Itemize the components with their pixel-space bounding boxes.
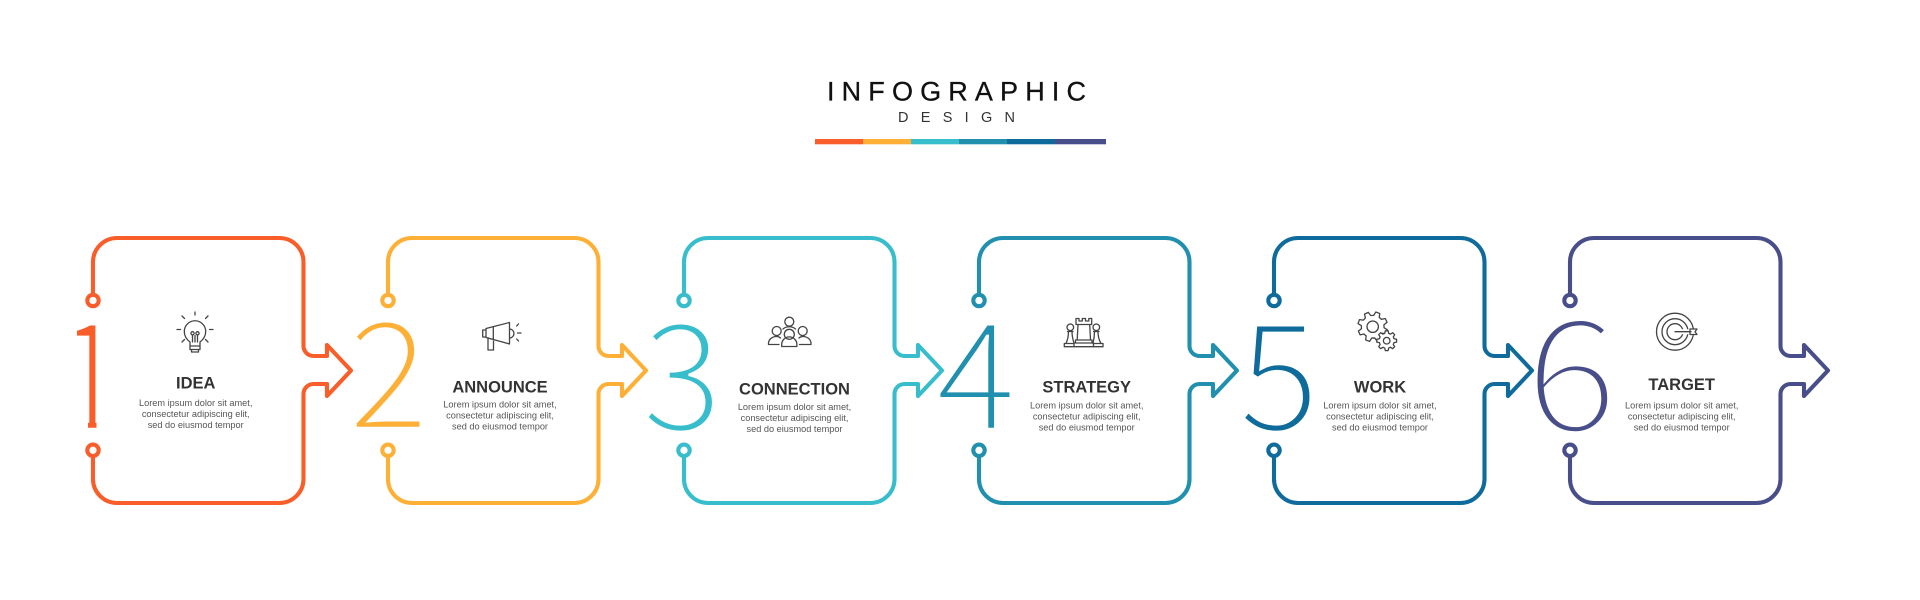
text: work body [1323, 401, 1437, 433]
heading: target: TARGET [1648, 376, 1715, 394]
frame and arrow 6 [1564, 238, 1828, 503]
text: target body: consectetur adipiscing elit, [1628, 412, 1736, 422]
text: target body: sed do eiusmod tempor [1634, 423, 1730, 433]
text: idea body: Lorem ipsum dolor sit amet, [139, 398, 252, 408]
text: announce body [443, 400, 557, 432]
text: strategy body [1030, 401, 1143, 433]
text: connection body [738, 402, 851, 434]
text: idea body [139, 398, 252, 430]
text: target body [1625, 401, 1738, 433]
panel: step 3 connection [642, 238, 942, 503]
number 6: 6 [1526, 251, 1617, 476]
heading: announce: ANNOUNCE [452, 378, 548, 396]
number 1: 1 [50, 257, 129, 472]
frame and arrow 1 [87, 238, 351, 503]
heading: strategy: STRATEGY [1042, 379, 1131, 397]
text: strategy body: Lorem ipsum dolor sit amet, [1030, 401, 1143, 411]
number 4: 4 [936, 257, 1016, 472]
title [827, 76, 1086, 126]
text: idea body: consectetur adipiscing elit, [142, 409, 250, 419]
text: connection body: Lorem ipsum dolor sit amet, [738, 402, 851, 412]
text: work body: sed do eiusmod tempor [1332, 423, 1428, 433]
text: connection body: consectetur adipiscing elit, [741, 413, 848, 423]
heading: idea: IDEA [176, 375, 215, 393]
frame and arrow 2 [382, 238, 646, 503]
frame and arrow 5 [1268, 238, 1532, 503]
panel: step 5 work [1239, 238, 1532, 503]
text: strategy body: consectetur adipiscing elit, [1033, 412, 1141, 422]
icon: gears [1354, 308, 1397, 351]
text: announce body: sed do eiusmod tempor [452, 422, 548, 432]
panel: step 1 idea [50, 238, 351, 503]
title: DESIGN [898, 110, 1015, 126]
icon: chess pieces [1064, 318, 1103, 347]
text: idea body: sed do eiusmod tempor [148, 420, 244, 430]
text: work body: consectetur adipiscing elit, [1326, 412, 1434, 422]
text: announce body: consectetur adipiscing elit, [446, 411, 554, 421]
heading: connection: CONNECTION [739, 380, 850, 398]
frame and arrow 4 [973, 238, 1237, 503]
panel: step 4 strategy [936, 238, 1237, 503]
text: connection body: sed do eiusmod tempor [746, 424, 843, 434]
panel: step 6 target [1526, 238, 1828, 503]
number 3: 3 [642, 258, 722, 473]
panel: step 2 announce [349, 238, 646, 503]
number 2: 2 [349, 256, 428, 471]
number 5: 5 [1239, 258, 1319, 473]
heading: work: WORK [1354, 379, 1406, 397]
text: announce body: Lorem ipsum dolor sit amet, [443, 400, 557, 410]
icon: people [768, 317, 811, 346]
icon: target [1656, 313, 1699, 350]
text: target body: Lorem ipsum dolor sit amet, [1625, 401, 1738, 411]
text: work body: Lorem ipsum dolor sit amet, [1323, 401, 1437, 411]
frame and arrow 3 [678, 238, 942, 503]
title: INFOGRAPHIC [827, 76, 1086, 106]
text: strategy body: sed do eiusmod tempor [1039, 423, 1135, 433]
icon: megaphone [483, 322, 521, 350]
icon: light bulb [177, 312, 213, 352]
title colour bar [815, 139, 1106, 144]
